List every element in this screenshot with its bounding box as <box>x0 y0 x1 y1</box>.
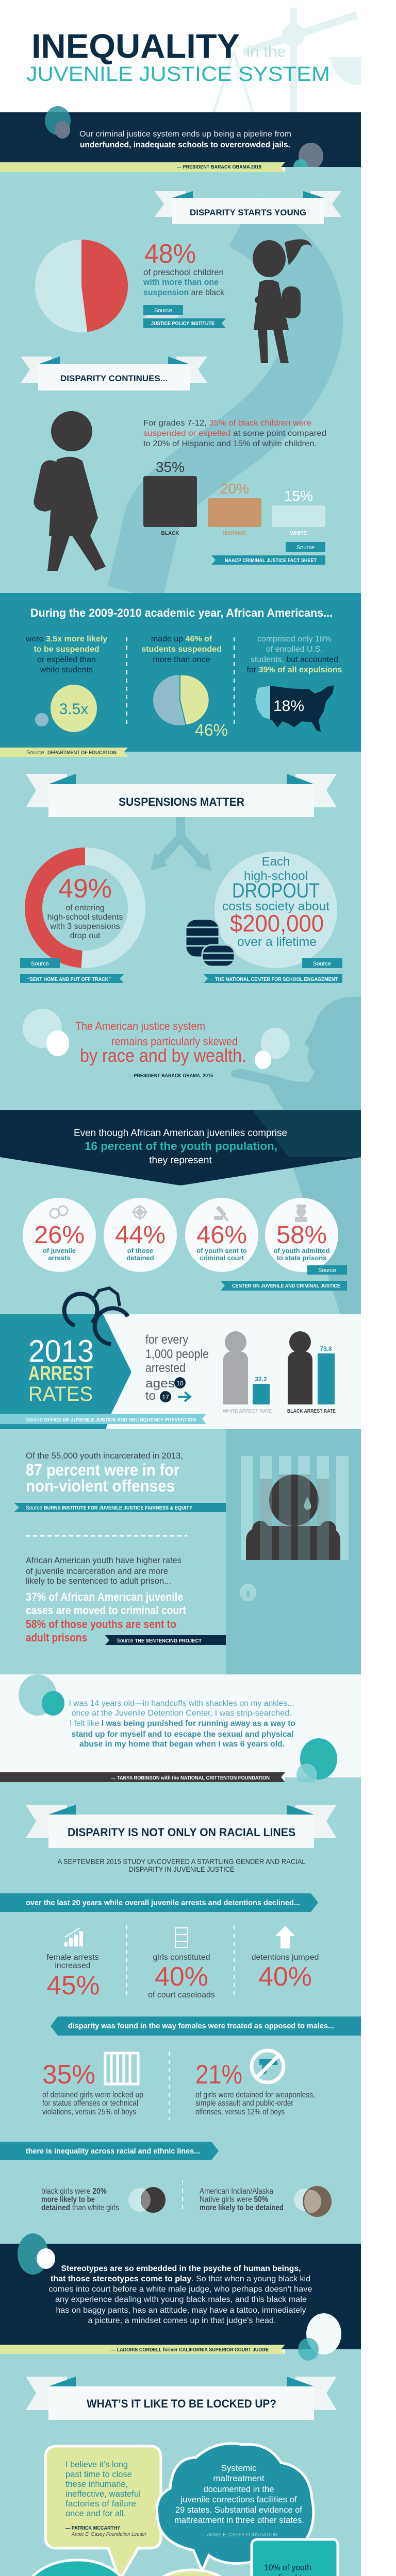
panel: 2013 arrest rates <box>0 1288 361 1429</box>
bubble: patrick mccarthy <box>45 2446 161 2576</box>
stat: detentions jumped 40% <box>252 1926 319 1992</box>
heading: During the 2009-2010 academic year, African Americans... <box>30 606 333 619</box>
source: sent home <box>20 958 124 983</box>
quote: Ladoris Cordell: Stereotypes are so embedded in the psyche of human beings, <box>61 2264 301 2273</box>
quote text: Our criminal justice system ends up being a pipeline from <box>79 130 291 139</box>
heading ribbon: suspensions matter <box>26 774 337 817</box>
source: national center: Source <box>313 961 331 967</box>
heading text <box>74 1128 287 1166</box>
stat 48% text: 48% <box>144 239 196 269</box>
bubble: systemic maltreatment cloud: documented in the <box>203 2484 274 2494</box>
banner: racial and ethnic lines <box>0 2142 219 2160</box>
quote: Ladoris Cordell: that those stereotypes come to play. So that when a young black kid <box>51 2275 310 2283</box>
bubble: patrick mccarthy: — PATRICK MCCARTHY <box>65 2526 120 2531</box>
bar chart: suspensions by race <box>143 459 325 536</box>
quote: skewed by race: The American justice system <box>75 1020 205 1032</box>
text: for every 1000: arrested <box>145 1361 186 1375</box>
quote: skewed by race: by race and by wealth. <box>80 1045 246 1066</box>
column: 18% map: students, but accounted <box>251 655 338 664</box>
text: grades 7-12: For grades 7-12, 35% of black children were <box>143 419 311 428</box>
icon: girl with backpack <box>253 239 312 363</box>
source: department of education <box>0 748 361 757</box>
source: NAACP: Source <box>296 545 315 551</box>
text: adult prison: of juvenile incarceration and are more <box>26 1566 168 1576</box>
heading text: Even though African American juveniles comprise <box>74 1128 287 1139</box>
icon: scales of justice background <box>205 8 361 162</box>
quote: Tanya Robinson: I felt like I was being punished for running away as a way to <box>70 1719 295 1728</box>
panel: 2009-2010 academic year <box>0 593 361 752</box>
quote: Tanya Robinson: once at the Juvenile Detention Center, I was strip-searched. <box>71 1709 292 1718</box>
stat: 35% status offenses: 35% <box>42 2060 95 2090</box>
text: grades 7-12: to 20% of Hispanic and 15% of white children. <box>143 439 317 448</box>
stat: girls constituted 40%: girls constituted <box>153 1953 210 1962</box>
stat: detentions jumped 40%: 40% <box>258 1962 312 1992</box>
panel: disparity starts young <box>0 167 361 593</box>
source: sentencing project <box>105 1635 226 1645</box>
dropout cost circle: $200,000 <box>230 910 324 937</box>
icon: speech bubbles right <box>293 143 323 175</box>
stat: 21% weaponless: 21% <box>195 2060 242 2090</box>
quote text <box>79 130 291 149</box>
stat: 35% status offenses <box>42 2053 143 2116</box>
heading ribbon: suspensions matter: SUSPENSIONS MATTER <box>119 795 244 808</box>
text: adult prison: African American youth have higher rates <box>26 1555 182 1565</box>
panel: what's it like to be locked up <box>0 2313 361 2576</box>
chart: white vs black arrest rate: BLACK ARREST RATE <box>287 1409 336 1414</box>
column: 3.5x: or expelled than <box>37 655 96 664</box>
dropout cost circle: high-school <box>244 869 308 883</box>
banner: over the last 20 years <box>0 1893 318 1912</box>
column: 3.5x: 3.5x <box>59 701 88 718</box>
title: 2013 arrest rates: RATES <box>28 1383 93 1405</box>
dropout cost circle: over a lifetime <box>237 935 317 949</box>
source: department of education: DEPARTMENT OF EDUCATION <box>47 750 117 756</box>
source: burns institute: Source BURNS INSTITUTE FOR JUVENILE JUSTICE FAIRNESS & EQUITY <box>26 1505 192 1511</box>
text: for every 1000: to <box>145 1389 156 1403</box>
donut chart 49%: drop out <box>70 931 101 940</box>
column: 18% map <box>247 635 342 734</box>
dropout cost circle: DROPOUT <box>232 879 320 902</box>
heading ribbon: disparity starts young: DISPARITY STARTS YOUNG <box>190 208 306 217</box>
bubble: patrick mccarthy: ineffective, wasteful <box>65 2489 141 2499</box>
bar chart: suspensions by race: 15% <box>284 488 313 504</box>
stat: 35% status offenses: for status offenses or technical <box>42 2099 138 2108</box>
bubble: BJS sexual abuse: 10% of youth <box>264 2563 311 2572</box>
source: NAACP <box>211 542 325 565</box>
source: justice policy institute: JUSTICE POLICY INSTITUTE <box>151 321 214 327</box>
text: adult prison: 37% of African American juvenile <box>26 1590 183 1603</box>
heading ribbon <box>26 1805 337 1848</box>
stat: female arrests 45% <box>46 1928 100 2001</box>
quote: Ladoris Cordell: comes into court before a white male judge, who perhaps doesn't have <box>48 2285 312 2294</box>
column: 18% map: for 39% of all expulsions <box>247 666 342 674</box>
heading ribbon: DISPARITY IS NOT ONLY ON RACIAL LINES <box>68 1826 295 1839</box>
bubble: depression study <box>131 2570 253 2576</box>
column: 3.5x: to be suspended <box>34 645 100 654</box>
source: national center: THE NATIONAL CENTER FOR SCHOOL ENGAGEMENT <box>215 977 338 982</box>
column: 3.5x: white students <box>40 666 93 674</box>
title: 2013 arrest rates <box>28 1334 94 1405</box>
text: adult prison: cases are moved to criminal court <box>26 1604 187 1617</box>
bubble: patrick mccarthy: factories of failure <box>65 2499 136 2509</box>
title: in the <box>246 43 286 60</box>
stat circle 58%: to state prisons <box>277 1254 326 1262</box>
column: 46% pie: 46% <box>195 721 228 739</box>
text: grades 7-12 <box>143 419 326 448</box>
bubble: patrick mccarthy: once and for all. <box>65 2509 126 2518</box>
quote: Ladoris Cordell: a picture, a mindset comes up in that judge's head. <box>88 2316 276 2325</box>
quote: Ladoris Cordell <box>0 2233 361 2354</box>
stat: 21% weaponless: simple assault and public-order <box>195 2099 294 2108</box>
source: national center <box>204 958 342 983</box>
column: 46% pie <box>141 635 228 739</box>
stat circle 26% <box>23 1198 96 1272</box>
source: CJCJ: Source <box>318 1267 336 1274</box>
text: grades 7-12: suspended or expelled at some point compared <box>143 429 326 438</box>
quote: Tanya Robinson: I was 14 years old—in handcuffs with shackles on my ankles... <box>69 1699 294 1708</box>
title: JUVENILE JUSTICE SYSTEM <box>26 63 330 86</box>
stat circle 58% <box>265 1198 338 1272</box>
source: justice policy institute <box>143 305 226 328</box>
stat: american indian 50% <box>200 2186 332 2217</box>
source: CJCJ <box>221 1265 347 1291</box>
title <box>26 27 330 86</box>
stat: black girls 20% <box>41 2187 166 2213</box>
dropout cost circle <box>214 852 337 968</box>
heading text: 16 percent of the youth population, <box>85 1140 277 1153</box>
stat: 21% weaponless: offenses, versus 12% of boys <box>195 2108 285 2116</box>
stat: 87 percent non-violent: 87 percent were in for <box>26 1461 179 1479</box>
banner: disparity females <box>51 2016 361 2036</box>
quote: Tanya Robinson: abuse in my home that began when I was 6 years old. <box>79 1740 285 1749</box>
stat: 87 percent non-violent: non-violent offenses <box>26 1477 175 1495</box>
attribution: — PRESIDENT BARACK OBAMA 2015 <box>177 164 261 170</box>
chart: white vs black arrest rate: WHITE ARREST RATE <box>223 1409 272 1414</box>
title: INEQUALITY <box>31 27 240 65</box>
stat circle 44%: of those <box>127 1247 153 1255</box>
header section <box>26 8 361 162</box>
donut chart 49%: of entering <box>65 904 105 912</box>
stat: girls constituted 40% <box>148 1928 215 1999</box>
bar chart: suspensions by race: HISPANIC <box>222 531 247 536</box>
stat circle 44%: detained <box>126 1254 154 1262</box>
stat: female arrests 45%: increased <box>55 1961 91 1970</box>
stat: detentions jumped 40%: detentions jumped <box>252 1953 319 1962</box>
source: sent home: “SENT HOME AND PUT OFF TRACK” <box>27 977 111 982</box>
bubble: patrick mccarthy: Annie E. Casey Foundation Leader <box>71 2532 147 2537</box>
quote: Tanya Robinson <box>0 1674 361 1786</box>
bubble: patrick mccarthy: past time to close <box>65 2469 132 2479</box>
quote: Tanya Robinson: stand up for myself and to escape the sexual and physical <box>71 1730 294 1739</box>
dropout cost circle: costs society about <box>222 900 329 913</box>
heading ribbon: disparity continues <box>21 357 207 391</box>
source: sent home: Source <box>31 961 49 967</box>
icon: boy with backpack <box>32 411 106 571</box>
donut chart 49% <box>34 856 137 959</box>
subtitle: A SEPTEMBER 2015 STUDY UNCOVERED A STARTLING GENDER AND RACIAL <box>58 1857 306 1866</box>
stat circle 44% <box>104 1198 177 1272</box>
bubble: suicide rate <box>19 2560 137 2576</box>
chart: white vs black arrest rate: 73.8 <box>320 1345 332 1352</box>
stat: 87 percent non-violent <box>26 1451 183 1495</box>
donut chart 49%: high-school students <box>47 913 123 922</box>
source: OJJDP <box>0 1414 206 1424</box>
stat 48% text <box>143 239 224 297</box>
stat circle 58%: 58% <box>276 1222 327 1249</box>
stat: girls constituted 40%: of court caseloads <box>148 1991 215 1999</box>
bubble: patrick mccarthy: these inhumane, <box>65 2479 128 2489</box>
bar chart: suspensions by race: 35% <box>156 459 185 475</box>
source: OJJDP: Source OFFICE OF JUVENILE JUSTICE AND DELINQUENCY PREVENTION <box>26 1417 196 1423</box>
quote: Ladoris Cordell: has on baggy pants, has an attitude, may have a tattoo, immediately <box>56 2306 306 2315</box>
column: 3.5x <box>25 635 107 732</box>
text: for every 1000 <box>145 1333 209 1403</box>
stat 48% text: with more than one <box>143 277 219 287</box>
bubble: BJS sexual abuse <box>252 2539 338 2576</box>
stat: american indian 50%: Native girls were 50% <box>200 2195 268 2204</box>
text: adult prison: 58% of those youths are sent to <box>26 1618 176 1631</box>
stat circle 26%: 26% <box>34 1222 85 1249</box>
stat: 21% weaponless <box>195 2050 315 2116</box>
column: 18% map: comprised only 18% <box>257 635 332 643</box>
stat 48% text: suspension are black <box>143 287 224 297</box>
stat: american indian 50%: American Indian/Alaska <box>200 2187 273 2196</box>
bar chart: suspensions by race: WHITE <box>290 531 307 536</box>
stat circle 26%: arrests <box>48 1254 71 1262</box>
subtitle <box>58 1857 306 1873</box>
chart: white vs black arrest rate: 32.2 <box>255 1376 267 1383</box>
subtitle: DISPARITY IN JUVENILE JUSTICE <box>129 1865 234 1873</box>
quote: Tanya Robinson: — TANYA ROBINSON with the NATIONAL CRITTENTON FOUNDATION <box>111 1775 270 1781</box>
column: 46% pie: made up 46% of <box>151 635 212 643</box>
panel: suspensions matter <box>0 757 361 1110</box>
column: 18% map: 18% <box>273 698 304 715</box>
quote: Ladoris Cordell: any experience dealing with young black males, and this black male <box>55 2295 307 2304</box>
heading ribbon: WHAT’S IT LIKE TO BE LOCKED UP? <box>87 2397 276 2410</box>
quote: skewed by race: remains particularly skewed <box>111 1035 238 1048</box>
banner: disparity females: disparity was found in the way females were treated as opposed to males... <box>68 2022 334 2030</box>
heading ribbon: disparity starts young <box>155 191 341 224</box>
chart: white vs black arrest rate <box>223 1331 336 1414</box>
text: adult prison: likely to be sentenced to adult prison... <box>26 1576 171 1586</box>
icon: coin stacks <box>186 919 235 967</box>
bubble: systemic maltreatment cloud: juvenile corrections facilities of <box>180 2495 297 2504</box>
donut chart 49%: 49% <box>58 874 112 904</box>
source: justice policy institute: Source <box>154 308 172 314</box>
source: CJCJ: CENTER ON JUVENILE AND CRIMINAL JUSTICE <box>232 1283 340 1289</box>
column: 46% pie: students suspended <box>141 645 222 654</box>
donut chart 49%: with 3 suspensions <box>50 922 120 931</box>
quote: skewed by race <box>23 1009 290 1079</box>
stat circle 46%: criminal court <box>200 1254 244 1262</box>
icon: bubbles right of quote <box>298 2313 341 2361</box>
stat: girls constituted 40%: 40% <box>155 1962 208 1992</box>
quote text: underfunded, inadequate schools to overcrowded jails. <box>80 141 290 149</box>
quote: skewed by race: — PRESIDENT BARACK OBAMA, 2015 <box>128 1073 213 1079</box>
stat: black girls 20%: more likely to be <box>41 2195 95 2204</box>
title: 2013 arrest rates: 2013 <box>28 1334 94 1368</box>
quote: Ladoris Cordell: — LADORIS CORDELL former CALIFORNIA SUPERIOR COURT JUDGE <box>111 2347 269 2353</box>
dropout cost circle: Each <box>262 855 290 869</box>
column: 3.5x: were 3.5x more likely <box>25 635 107 643</box>
text: for every 1000: 1,000 people <box>145 1347 209 1361</box>
stat: 21% weaponless: of girls were detained for weaponless, <box>195 2091 315 2099</box>
panel: incarceration <box>0 1429 361 1674</box>
bubble: patrick mccarthy: I believe it’s long <box>65 2460 128 2469</box>
text: for every 1000: ages <box>145 1377 175 1391</box>
bubble: systemic maltreatment cloud: 29 states. Substantial evidence of <box>175 2505 302 2515</box>
stat circle 26%: of juvenile <box>43 1247 76 1255</box>
stat: female arrests 45%: 45% <box>46 1971 100 2001</box>
stat: black girls 20%: black girls were 20% <box>41 2187 107 2196</box>
stat: american indian 50%: more likely to be detained <box>200 2204 284 2212</box>
text: for every 1000: for every <box>145 1333 188 1347</box>
source: NAACP: NAACP CRIMINAL JUSTICE FACT SHEET <box>225 558 317 564</box>
stat: 35% status offenses: violations, versus 25% of boys <box>42 2108 136 2116</box>
source: department of education: Source <box>26 750 44 756</box>
source: sentencing project: Source THE SENTENCING PROJECT <box>117 1638 202 1644</box>
stat: black girls 20%: detained than white girls <box>41 2204 119 2212</box>
text: adult prison <box>26 1555 187 1644</box>
text: adult prison: adult prisons <box>26 1631 87 1644</box>
bar chart: suspensions by race: BLACK <box>161 531 179 536</box>
bubble: systemic maltreatment cloud: maltreatment <box>213 2473 265 2483</box>
bubble: systemic maltreatment cloud: — ANNIE E. CASEY FOUNDATION <box>201 2532 277 2538</box>
bubble: systemic maltreatment cloud: Systemic <box>221 2463 257 2473</box>
stat: 87 percent non-violent: Of the 55,000 youth incarcerated in 2013, <box>26 1451 183 1461</box>
icon: speech bubbles left <box>45 106 71 139</box>
stat 48% text: of preschool children <box>143 267 224 277</box>
quote banner: Obama pipeline <box>0 106 361 175</box>
heading text: they represent <box>149 1155 212 1166</box>
stat: female arrests 45%: female arrests <box>46 1953 99 1962</box>
panel: disparity not only on racial lines <box>0 1782 361 2244</box>
bar chart: suspensions by race: 20% <box>220 481 249 497</box>
title: 2013 arrest rates: ARREST <box>28 1362 93 1385</box>
stat: 35% status offenses: of detained girls were locked up <box>42 2091 143 2099</box>
stat circle 46% <box>185 1198 258 1272</box>
column: 18% map: of enrolled U.S. <box>266 645 323 654</box>
stat circle 44%: 44% <box>115 1222 166 1249</box>
arrow: split arrows below ribbon <box>151 817 211 871</box>
text: for every 1000: 10 <box>176 1380 184 1387</box>
icon: obama silhouette <box>231 996 361 1110</box>
bubble: systemic maltreatment cloud: maltreatment in three other states. <box>174 2515 304 2525</box>
heading ribbon <box>26 2377 337 2420</box>
panel: 16 percent <box>0 1110 361 1314</box>
icon: handcuffs <box>64 1288 128 1344</box>
text: for every 1000: 17 <box>162 1394 169 1401</box>
banner: over the last 20 years: over the last 20 years while overall juvenile arrests and detentions declined... <box>26 1899 300 1907</box>
bubble: systemic maltreatment cloud <box>157 2444 314 2571</box>
stat circle 58%: of youth admitted <box>273 1247 330 1255</box>
stat circle 46%: of youth sent to <box>196 1247 247 1255</box>
pie chart 48% <box>35 240 128 332</box>
banner: racial and ethnic lines: there is inequality across racial and ethnic lines... <box>26 2147 200 2156</box>
source: burns institute <box>14 1503 226 1512</box>
icon: jail door with child <box>226 1429 361 1674</box>
stat circle 46%: 46% <box>196 1222 247 1249</box>
column: 46% pie: more than once <box>153 655 210 664</box>
heading ribbon: disparity continues: DISPARITY CONTINUES... <box>60 374 168 383</box>
